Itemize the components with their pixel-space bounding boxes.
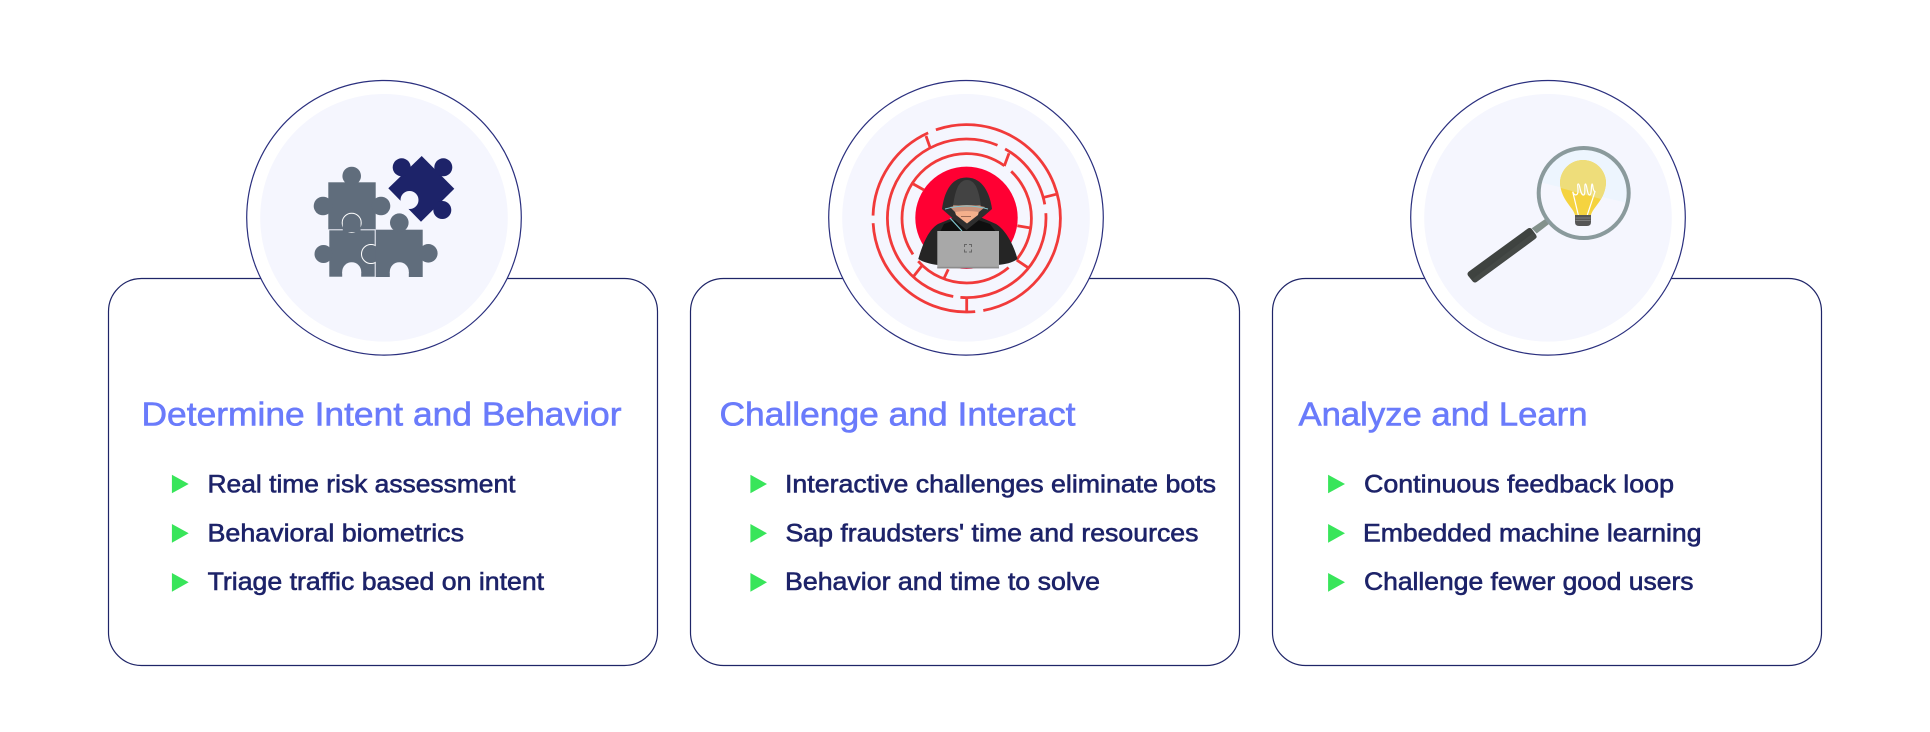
bullet text: Challenge fewer good users	[1364, 568, 1694, 596]
heading 3: Analyze and Learn	[1298, 396, 1588, 432]
panel: determine intent and behavior	[108, 80, 658, 666]
bullet text: Real time risk assessment	[208, 470, 516, 498]
bullet text: Behavioral biometrics	[208, 520, 464, 548]
bullet text: Behavior and time to solve	[785, 568, 1100, 596]
icon: puzzle pieces	[314, 156, 454, 281]
icon circle 2	[829, 80, 1103, 355]
panel: challenge and interact	[690, 80, 1240, 666]
bullet list 1	[172, 470, 544, 596]
bullet arrow	[1328, 524, 1345, 543]
bullet arrow	[750, 475, 767, 493]
hacker figure	[918, 178, 1018, 265]
bullet text: Embedded machine learning	[1363, 520, 1702, 548]
maze rings	[873, 125, 1060, 313]
card outline 3	[1272, 278, 1822, 666]
bullet arrow	[750, 524, 767, 543]
light bulb	[1560, 160, 1606, 226]
bullet text: Triage traffic based on intent	[208, 568, 544, 596]
icon circle 3	[1411, 80, 1685, 355]
bullet list 3	[1328, 470, 1702, 596]
laptop	[937, 231, 999, 268]
card outline 1	[108, 278, 658, 666]
card outline 2	[690, 278, 1240, 666]
bullet arrow	[172, 524, 189, 543]
icon: magnifier with light bulb	[1468, 146, 1631, 282]
magnifier glass	[1536, 146, 1631, 240]
bullet arrow	[172, 475, 189, 493]
panel: analyze and learn	[1272, 80, 1822, 666]
bullet arrow	[1328, 573, 1345, 592]
bullet list 2	[750, 470, 1216, 596]
icon: maze with hacker	[873, 125, 1060, 313]
red disc	[915, 167, 1018, 269]
heading 1: Determine Intent and Behavior	[142, 396, 622, 432]
bullet arrow	[172, 573, 189, 592]
bullet arrow	[1328, 475, 1345, 493]
bullet text: Continuous feedback loop	[1364, 470, 1674, 498]
bullet text: Interactive challenges eliminate bots	[785, 470, 1216, 498]
bullet arrow	[750, 573, 767, 592]
bullet text: Sap fraudsters' time and resources	[786, 520, 1198, 548]
magnifier handle	[1470, 218, 1549, 282]
heading 2: Challenge and Interact	[720, 396, 1076, 432]
icon circle 1	[247, 80, 521, 355]
